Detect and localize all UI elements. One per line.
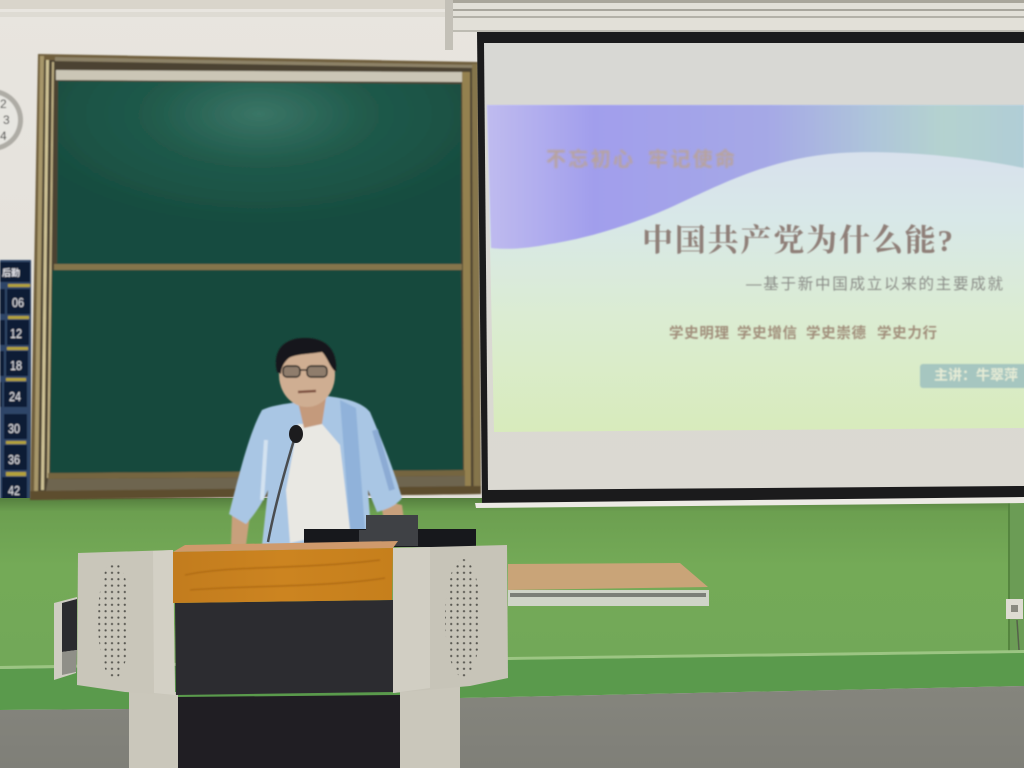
power outlet <box>1006 599 1023 650</box>
lectern base <box>129 684 460 768</box>
background wall <box>0 0 1024 520</box>
slide slogan <box>546 147 735 171</box>
slide keywords <box>669 324 937 342</box>
timetable wall chart: 12 <box>10 326 22 341</box>
green lower wall <box>0 498 1024 710</box>
wall clock: 4 <box>0 129 7 143</box>
lecturer <box>229 338 404 545</box>
timetable wall chart: 06 <box>12 295 24 310</box>
slide speaker label <box>920 364 1024 388</box>
lecturer arms skin <box>231 515 250 545</box>
slide slogan: 不忘初心 <box>546 148 633 171</box>
lecturer hair <box>276 338 336 374</box>
timetable wall chart <box>0 260 31 503</box>
slide subtitle: —基于新中国成立以来的主要成就 <box>746 275 1003 293</box>
microphone <box>268 425 303 542</box>
lectern wooden top <box>173 541 398 603</box>
blackboard frame <box>30 54 481 500</box>
lecturer mouth <box>298 391 316 392</box>
wall clock <box>0 89 23 151</box>
blackboard lower panel <box>50 270 463 473</box>
wall clock: 2 <box>0 97 7 111</box>
timetable wall chart: 24 <box>9 389 21 404</box>
lecturer face <box>279 343 335 407</box>
slide purple wave <box>487 105 1024 249</box>
blackboard <box>30 54 481 500</box>
lectern right wing <box>393 545 508 693</box>
slide keywords: 学史崇德 <box>806 324 866 342</box>
lectern side box <box>54 597 77 680</box>
slide keywords: 学史增信 <box>737 324 797 342</box>
slide <box>487 105 1024 432</box>
lectern right speaker grille <box>445 559 481 677</box>
timetable wall chart: 30 <box>8 421 20 436</box>
lectern dark front panel <box>175 600 393 695</box>
lectern left speaker grille <box>98 561 130 679</box>
lectern <box>54 541 508 768</box>
slide keywords: 学史力行 <box>877 324 937 342</box>
slide keywords: 学史明理 <box>669 324 730 342</box>
timetable wall chart: 后勤 <box>2 267 20 278</box>
timetable wall chart: 18 <box>10 358 22 373</box>
projection screen <box>475 32 1024 508</box>
timetable wall chart: 36 <box>8 452 20 467</box>
lecturer neck <box>298 398 326 428</box>
slide speaker label: 主讲：牛翠萍 <box>934 367 1018 383</box>
blackboard upper panel <box>57 81 461 264</box>
floor <box>0 686 1024 768</box>
lecturer white t-shirt <box>286 424 350 543</box>
slide slogan: 牢记使命 <box>648 147 735 171</box>
lectern left wing <box>77 550 175 695</box>
lecturer glasses <box>283 366 327 377</box>
timetable wall chart: 42 <box>8 483 20 498</box>
slide title: 中国共产党为什么能? <box>642 223 953 258</box>
wall clock: 3 <box>3 113 10 127</box>
slide background <box>487 105 1024 432</box>
wooden slide-out shelf <box>508 563 709 606</box>
ceiling trunking <box>0 0 1024 50</box>
lecturer jacket <box>229 396 402 545</box>
monitor on lectern <box>304 515 476 547</box>
